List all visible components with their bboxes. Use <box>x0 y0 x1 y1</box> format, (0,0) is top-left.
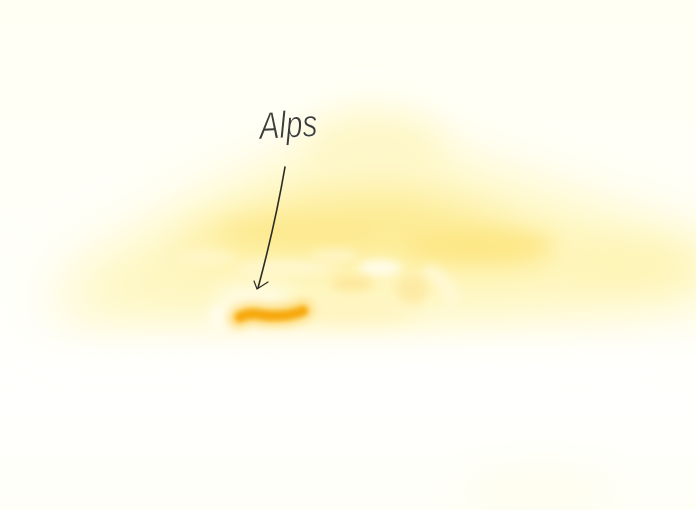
heat map: pale mottling around the mountains <box>0 250 696 385</box>
label: Alps: Alps <box>257 103 318 148</box>
hot spot: Alps <box>238 310 303 318</box>
heat map: broad yellow field over central Europe <box>60 115 696 510</box>
arrow: pointing to the Alps <box>254 167 285 289</box>
